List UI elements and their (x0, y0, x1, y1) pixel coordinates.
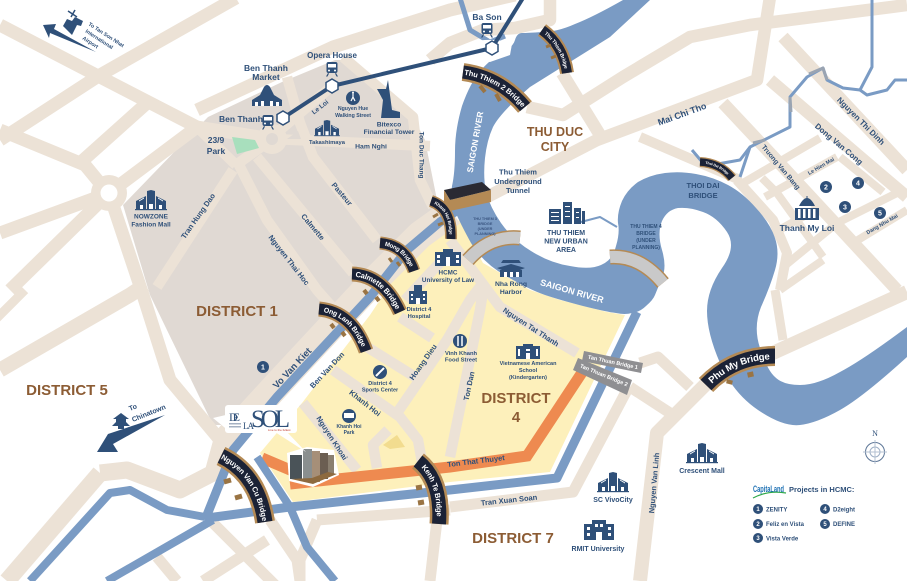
callout: De La Sol logo (213, 405, 306, 452)
street names: Ton Duc Thang (418, 132, 425, 178)
label: Crescent Mall: Crescent Mall (679, 468, 725, 475)
roundabout (91, 175, 127, 211)
label: Takashimaya: Takashimaya (309, 140, 346, 146)
label: Thoi Dai Bridge: THOI DAI (687, 181, 719, 190)
label: Thu Duc City: THU DUC (527, 125, 583, 139)
bridge: Tan Thuan 2: Tan Thuan Bridge 2 (579, 364, 628, 388)
label: Nguyen Hue Walking Street: Walking Street (335, 113, 371, 119)
label: District 5: DISTRICT 5 (26, 382, 108, 399)
label: Saigon River lower: SAIGON RIVER (539, 277, 605, 305)
label: District 4: DISTRICT (481, 390, 551, 407)
label: Bitexco: Bitexco (377, 122, 401, 128)
roads south (157, 510, 450, 581)
icon: Khanh Hoi Park (342, 409, 356, 423)
bridge: Tan Thuan 1 (582, 351, 643, 373)
bridge: Ong Lanh (318, 302, 373, 354)
street names: Nguyen Khoai (314, 414, 349, 462)
label: Thu Thiem Underground Tunnel: Thu Thiem (499, 168, 537, 176)
label: Khanh Hoi Park: Khanh Hoi (336, 424, 362, 430)
bridge: Thu Thiem (538, 24, 574, 74)
legend: CapitaLand projects: 2 (756, 522, 760, 528)
project number markers (257, 177, 886, 373)
label: Thu Thiem 3 bridge planned: (UNDER (478, 227, 493, 231)
street names: Mai Chi Tho (656, 101, 708, 128)
label: NOWZONE: Fashion Mall (131, 222, 171, 228)
project number markers: 2 (824, 184, 828, 192)
roads District 4 (303, 240, 577, 470)
icon: Food Street (453, 334, 467, 348)
project marker: De La Sol building (287, 447, 339, 487)
street names: Ben Van Don (308, 350, 346, 390)
area: District 4 (260, 220, 625, 502)
label: Thu Thiem 4 bridge planned: (UNDER (636, 238, 656, 244)
icon: pagoda (112, 413, 130, 429)
project number markers: 5 (878, 210, 882, 218)
icon: train Ba Son (481, 23, 493, 38)
street names: Nguyen Van Linh (647, 452, 661, 514)
icon: Nguyen Hue Walking Street (346, 91, 360, 105)
label: District 7: DISTRICT 7 (472, 530, 554, 547)
metro station: Ben Thanh (277, 111, 289, 125)
project number markers: 3 (843, 204, 847, 212)
arrow: Chinatown (97, 415, 165, 452)
label: Opera House: Opera House (307, 51, 357, 60)
label: Nha Rong Harbor: Harbor (500, 289, 522, 296)
bridge: Ong Lanh: Ong Lanh Bridge (324, 308, 365, 346)
legend: CapitaLand projects: Projects in HCMC: (789, 485, 854, 494)
label: airport line 3: Airport (81, 36, 99, 50)
compass: N (872, 429, 878, 438)
bridge: Calmette: Calmette Bridge (356, 272, 399, 310)
legend: CapitaLand projects: 3 (756, 536, 760, 542)
label: SC VivoCity: SC VivoCity (593, 497, 633, 504)
street names: Dong Van Cong (813, 122, 865, 167)
bridge: Thu Thiem 4 (planned) (610, 257, 663, 283)
legend: CapitaLand projects: Vista Verde (766, 536, 799, 542)
label: Sports Center: Sports Center (362, 388, 399, 394)
label: Ben Thanh Market: Ben Thanh (244, 63, 288, 73)
icon: Sports Center (373, 365, 387, 379)
label: HCMC University of Law: University of Law (422, 277, 474, 284)
compass (863, 429, 887, 464)
label: Nguyen Hue Walking Street: Nguyen Hue (338, 106, 368, 112)
label: Chinatown: Chinatown (131, 404, 167, 424)
project number markers: 4 (856, 180, 860, 188)
label: Ben Thanh: Ben Thanh (219, 114, 263, 124)
bridge: Khanh Hoi: Khanh Hoi Bridge (434, 201, 452, 234)
icon: Thu Thiem New Urban Area (549, 202, 585, 224)
callout: De La Sol logo: SOL (251, 406, 290, 433)
bridge: Kenh Te: Kenh Te Bridge (422, 464, 442, 516)
street names: Nguyen Thi Dinh (835, 96, 887, 147)
street names: Le Hien Mai (807, 157, 836, 177)
label: Thu Thiem New Urban Area: AREA (556, 247, 576, 254)
label: Thanh My Loi: Thanh My Loi (780, 223, 834, 233)
bridge: Thoi Dai: Thoi Dai Bridge (706, 161, 728, 174)
bridge: Khanh Hoi (429, 195, 457, 240)
bridge: Nguyen Van Cu: Nguyen Van Cu Bridge (221, 454, 266, 521)
label: Vinh Khanh Food Street: Food Street (445, 358, 477, 364)
canals (30, 0, 637, 581)
street names: Pasteur (330, 181, 354, 208)
icon: HCMC University of Law (435, 249, 461, 266)
label: Thu Thiem 3 bridge planned: PLANNING) (474, 232, 496, 236)
street names: Calmette (299, 212, 327, 242)
label: Thu Thiem 3 bridge planned: BRIDGE (478, 222, 493, 226)
label: District 4: 4 (512, 409, 521, 426)
label: Thu Thiem Underground Tunnel: Underground (494, 177, 542, 186)
street names: Ton That Thuyet (447, 453, 506, 469)
label: Vinh Khanh Food Street: Vinh Khanh (445, 351, 478, 357)
label: airport line 1: To Tan Son Nhat (87, 22, 125, 49)
label: Khanh Hoi Park: Park (344, 430, 355, 436)
street names: Nguyen Tat Thanh (501, 306, 561, 349)
label: Bitexco: Financial Tower (364, 129, 415, 136)
legend: CapitaLand projects: CapitaLand (753, 484, 784, 494)
street names: Le Loi (311, 99, 330, 116)
label: School: (Kindergarten) (509, 375, 547, 381)
Ton That Thuyet road (262, 368, 585, 484)
street names: Ham Nghi (355, 143, 387, 150)
Saigon River (451, 0, 907, 425)
street names (179, 96, 900, 514)
label: Nha Rong Harbor: Nha Rong (495, 281, 527, 288)
Ba Son island (470, 40, 512, 62)
label: To: To (128, 403, 138, 413)
roads east (430, 0, 907, 581)
legend: CapitaLand projects: 4 (823, 507, 827, 513)
bridge: Tan Thuan 1: Tan Thuan Bridge 1 (587, 355, 638, 371)
metro line (283, 0, 523, 118)
callout: De La Sol logo: DE (229, 410, 240, 424)
label: Ba Son: Ba Son (472, 12, 502, 22)
icon: train Ben Thanh (262, 115, 274, 130)
bridge: Thu Thiem 3 (planned) (468, 238, 520, 260)
street names: Truong Van Bang (760, 144, 801, 191)
arrow: airport (43, 24, 96, 52)
label: Saigon River upper: SAIGON RIVER (465, 111, 485, 173)
icon: train Opera House (326, 62, 338, 76)
bridge: Kenh Te (412, 454, 449, 525)
bridge: Mong (380, 236, 420, 273)
icon: SC VivoCity (597, 472, 629, 492)
area: District 1 (123, 60, 440, 425)
bridge: Thoi Dai (700, 157, 736, 182)
street names: Dang Nhu Mai (866, 213, 900, 236)
icon: Takashimaya (314, 120, 340, 136)
legend: CapitaLand projects: 1 (756, 507, 760, 513)
icon: Thanh My Loi (795, 196, 819, 220)
label: Thu Thiem New Urban Area: NEW URBAN (544, 238, 588, 246)
legend: CapitaLand projects: DEFINE (833, 522, 855, 528)
icon: airport (63, 10, 83, 35)
bridge: Phu My (698, 346, 775, 392)
label: District 4 Hospital: District 4 (407, 307, 432, 313)
street names: Nguyen Thai Hoc (266, 233, 311, 287)
label: airport line 2: International (84, 29, 114, 51)
street names: Hoang Dieu (407, 342, 439, 382)
Ben Thanh roundabout (257, 124, 301, 154)
label: Thu Thiem 4 bridge planned: BRIDGE (636, 231, 656, 237)
label: Thu Thiem Underground Tunnel: Tunnel (506, 186, 530, 195)
bridge: Tan Thuan 2 (573, 358, 632, 395)
label: Thu Thiem 4 bridge planned: PLANNING) (632, 245, 660, 251)
street names: Ton Dan (462, 370, 477, 401)
street names: Tran Hung Dao (179, 191, 217, 241)
metro station: Opera House (326, 79, 338, 93)
icon: Bitexco tower (377, 80, 400, 118)
street names: Khanh Hoi (347, 388, 382, 418)
park shape in District 4 (383, 435, 405, 449)
label: School: Vietnamese American (500, 361, 557, 367)
icon: NOWZONE mall (135, 190, 167, 210)
label: Thu Thiem 3 bridge planned: THU THIEM 3 (473, 217, 497, 221)
bridge: Phu My: Phu My Bridge (708, 354, 770, 384)
23/9 Park (232, 137, 259, 154)
legend: CapitaLand projects: ZENITY (766, 508, 787, 514)
legend: CapitaLand projects: D2eight (833, 508, 855, 514)
label: School: School (519, 368, 538, 374)
callout: De La Sol logo: Live to the fullest (268, 428, 291, 432)
label: Thu Duc City: CITY (541, 140, 570, 154)
icon: Nha Rong Harbor (497, 260, 525, 277)
tunnel building (444, 182, 491, 211)
legend: CapitaLand projects: Feliz en Vista (766, 522, 805, 528)
label: District 1: DISTRICT 1 (196, 303, 278, 320)
label: Thu Thiem New Urban Area: THU THIEM (547, 230, 585, 237)
label: 23/9 Park: Park (207, 146, 225, 156)
label: Thoi Dai Bridge: BRIDGE (688, 191, 718, 200)
callout: De La Sol logo: LA (243, 421, 254, 431)
label: Ben Thanh Market: Market (252, 72, 280, 82)
legend: CapitaLand projects (753, 484, 855, 543)
label: Sports Center: District 4 (368, 381, 393, 387)
label: RMIT University: RMIT University (572, 546, 625, 553)
label: 23/9 Park: 23/9 (208, 135, 225, 145)
bridge: Thu Thiem 2: Thu Thiem 2 Bridge (464, 70, 524, 107)
icon: Ben Thanh Market (252, 85, 282, 106)
label: NOWZONE: NOWZONE (134, 214, 169, 220)
creeks (577, 0, 907, 227)
street names: Tran Xuan Soan (480, 493, 538, 508)
project number markers: 1 (261, 364, 265, 372)
label: Thu Thiem 4 bridge planned: THU THIEM 4 (630, 224, 662, 230)
bridge: Thu Thiem: Thu Thiem Bridge (545, 32, 567, 69)
metro station: Ba Son (486, 41, 498, 55)
bridge: Mong: Mong Bridge (385, 242, 413, 266)
label: District 4 Hospital: Hospital (408, 314, 431, 320)
icon: District 4 Hospital (409, 285, 427, 304)
icon: Crescent Mall (686, 443, 718, 463)
icon: RMIT University (584, 520, 614, 540)
street names: Vo Van Kiet (271, 345, 315, 391)
icon: Vietnamese American School (516, 344, 540, 359)
label: HCMC University of Law: HCMC (439, 270, 458, 276)
legend: CapitaLand projects: 5 (823, 522, 827, 528)
